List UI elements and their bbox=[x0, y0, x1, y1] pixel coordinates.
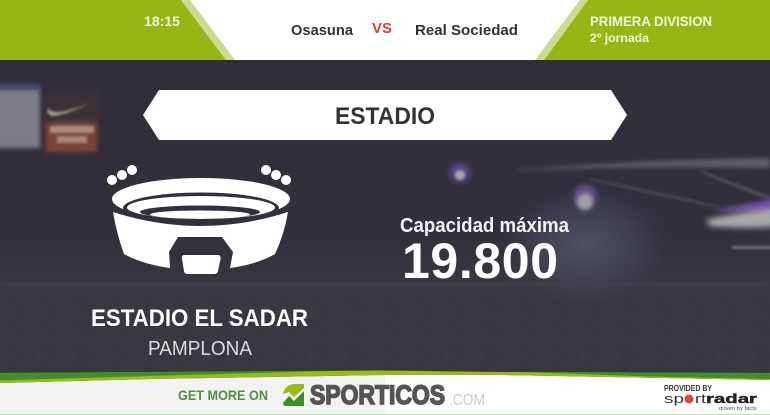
Sportradar credit: PROVIDED BY bbox=[664, 384, 713, 393]
banner heading: ESTADIO bbox=[335, 103, 435, 130]
Sportradar credit: radar bbox=[706, 391, 757, 406]
Sportradar credit: rt bbox=[695, 391, 707, 406]
right green panel bbox=[544, 0, 770, 60]
stadium name: ESTADIO EL SADAR bbox=[91, 305, 308, 332]
city: PAMPLONA bbox=[148, 338, 253, 360]
footer bbox=[0, 370, 770, 415]
call to action: GET MORE ON bbox=[178, 387, 268, 403]
icon: stadium bbox=[107, 165, 291, 274]
domain suffix: .COM bbox=[449, 392, 485, 409]
capacity value: 19.800 bbox=[402, 233, 558, 289]
section banner bbox=[143, 90, 627, 140]
Sportradar credit: sp bbox=[664, 391, 684, 406]
kickoff time: 18:15 bbox=[144, 13, 180, 29]
left green panel bbox=[0, 0, 226, 60]
Sporticos wordmark: SPORTICOS bbox=[310, 380, 445, 410]
matchday: 2º jornada bbox=[590, 31, 649, 45]
home team: Osasuna bbox=[291, 22, 354, 39]
header bar bbox=[0, 0, 770, 60]
Sportradar credit: driven by facts bbox=[719, 406, 758, 412]
capacity label: Capacidad máxima bbox=[400, 215, 570, 237]
away team: Real Sociedad bbox=[415, 22, 518, 39]
Sportradar credit bbox=[664, 384, 758, 412]
competition name: PRIMERA DIVISION bbox=[590, 13, 712, 29]
versus label: VS bbox=[372, 20, 392, 37]
icon: Sporticos logo bbox=[283, 384, 304, 406]
blurred stadium background bbox=[0, 60, 770, 380]
